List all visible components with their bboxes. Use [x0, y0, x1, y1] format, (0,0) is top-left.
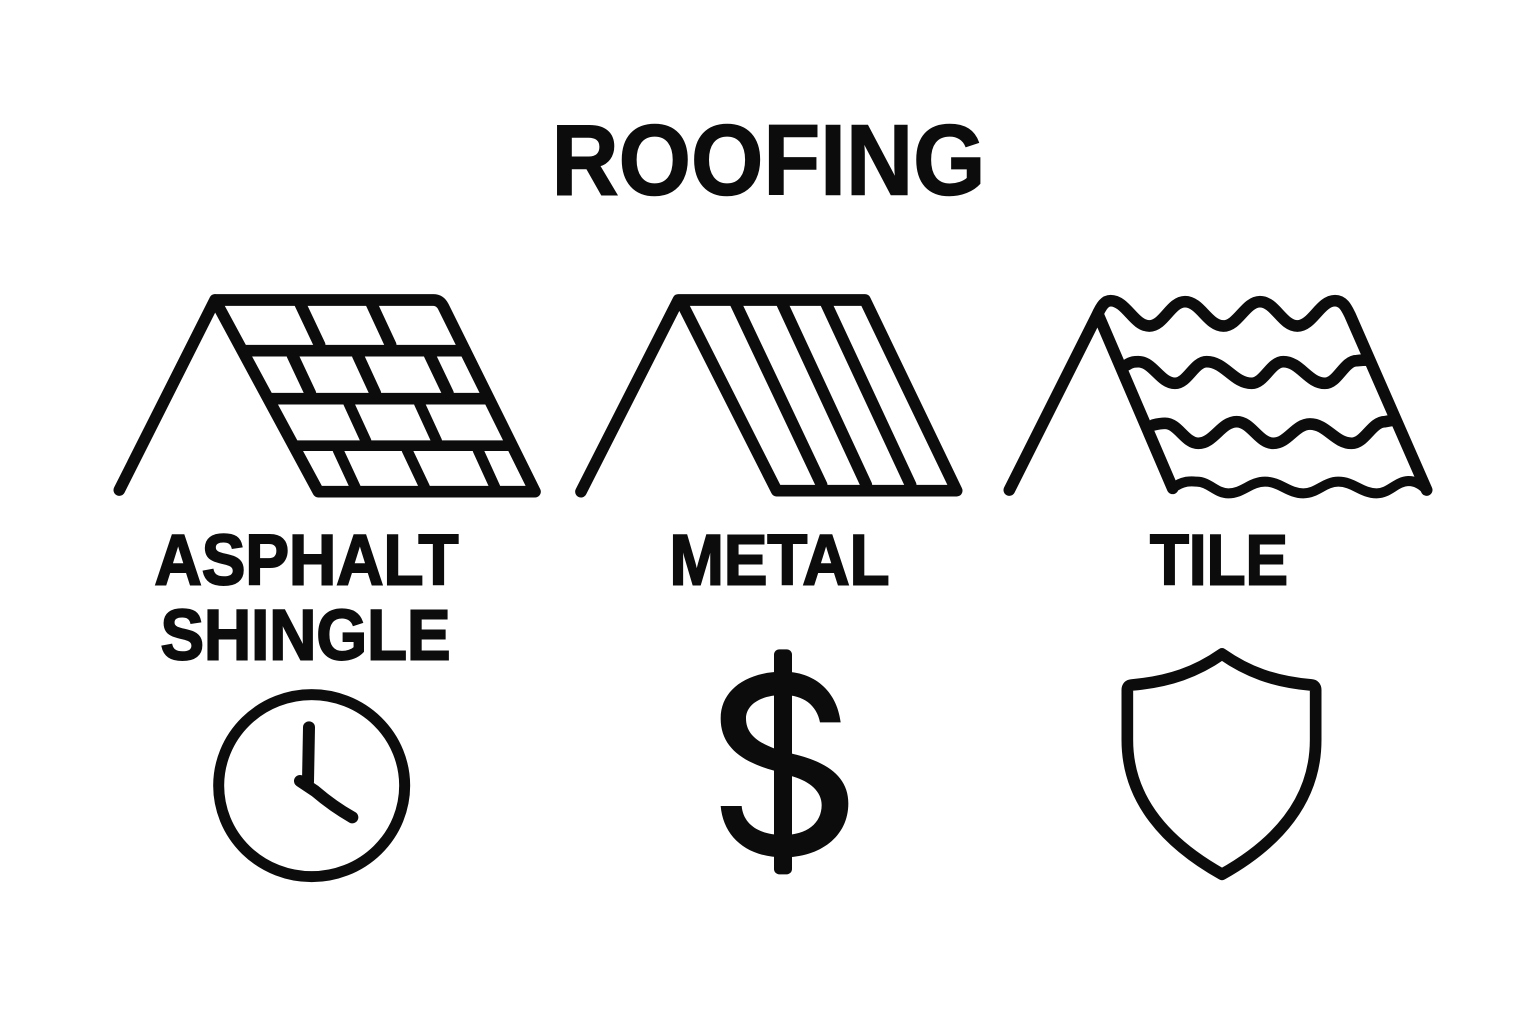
icon: tile roof: [1009, 301, 1427, 493]
label: metal: METAL: [670, 522, 890, 600]
icon: shield: [1127, 654, 1316, 874]
icon: metal roof: [581, 300, 957, 492]
label: tile: TILE: [1150, 522, 1288, 600]
icon: dollar sign: [721, 649, 848, 874]
label: asphalt: ASPHALT: [154, 522, 458, 600]
icon: asphalt shingle roof: [119, 300, 535, 492]
label: shingle: SHINGLE: [160, 596, 450, 676]
title: ROOFING: [552, 104, 986, 216]
icon: clock: [219, 695, 405, 877]
